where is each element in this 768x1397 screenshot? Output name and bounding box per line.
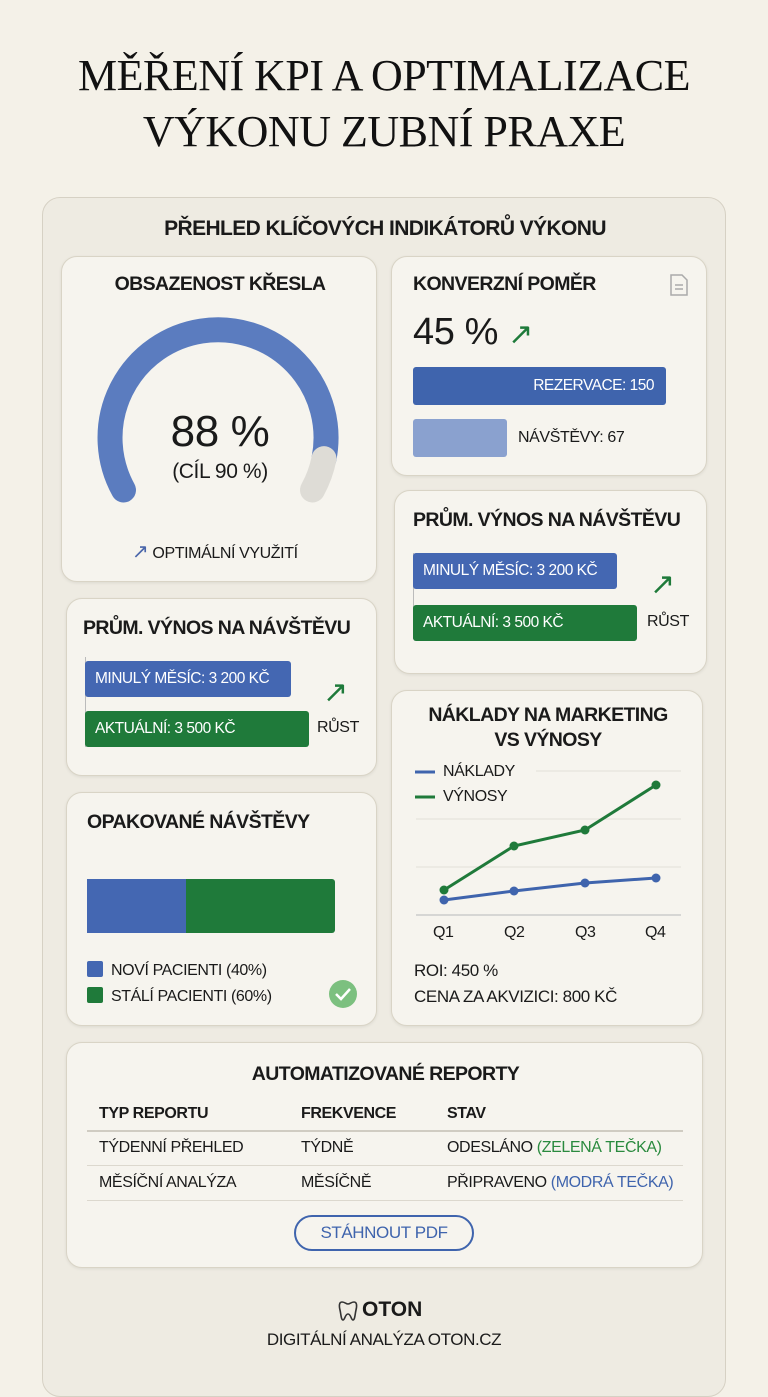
title xyxy=(78,51,690,156)
panel: repeat visits: STÁLÍ PACIENTI (60%) xyxy=(111,988,272,1005)
axis labels: Q1 xyxy=(433,924,454,941)
panel: revenue right: PRŮM. VÝNOS NA NÁVŠTĚVU xyxy=(413,509,680,531)
panel: repeat visits xyxy=(66,792,377,1026)
bars: MINULÝ MĚSÍC: 3 200 KČ xyxy=(95,670,269,687)
stacked bar xyxy=(87,879,335,933)
gauge xyxy=(98,317,339,502)
table xyxy=(87,1105,683,1201)
button: STÁHNOUT PDF xyxy=(320,1223,448,1242)
panel: revenue right: RŮST xyxy=(647,613,689,630)
heading: KONVERZNÍ POMĚR xyxy=(413,273,596,295)
panel: revenue right: AKTUÁLNÍ: 3 500 KČ xyxy=(423,614,563,631)
table: TÝDENNÍ PŘEHLED xyxy=(99,1139,243,1156)
value: 88 % xyxy=(171,407,269,456)
table: ODESLÁNO (ZELENÁ TEČKA) xyxy=(447,1139,662,1156)
panel: marketing chart: Q3 xyxy=(575,924,596,941)
panel: repeat visits: OPAKOVANÉ NÁVŠTĚVY xyxy=(87,811,310,833)
panel: conversion: NÁVŠTĚVY: 67 xyxy=(518,429,624,446)
panel: marketing chart: NÁKLADY xyxy=(443,763,515,780)
table: MĚSÍČNÍ ANALÝZA xyxy=(99,1174,236,1191)
icon: growth arrow: ↗ xyxy=(323,676,348,709)
section heading: PŘEHLED KLÍČOVÝCH INDIKÁTORŮ VÝKONU xyxy=(164,217,606,240)
icon: tooth xyxy=(338,1301,358,1321)
title: MĚŘENÍ KPI A OPTIMALIZACE xyxy=(78,51,690,100)
legend: NOVÍ PACIENTI (40%) xyxy=(111,962,267,979)
footer text: DIGITÁLNÍ ANALÝZA OTON.CZ xyxy=(267,1330,501,1349)
panel: marketing chart: Q2 xyxy=(504,924,525,941)
panel: conversion xyxy=(391,256,707,476)
bars xyxy=(85,661,291,697)
panel: marketing chart: NÁKLADY NA MARKETING xyxy=(428,704,668,726)
panel: chair occupancy xyxy=(61,256,377,582)
value: 45 % ↗ xyxy=(413,311,533,353)
panel: revenue left xyxy=(66,598,377,776)
panel: revenue right xyxy=(394,490,707,674)
table: TÝDNĚ xyxy=(301,1139,353,1156)
panel: marketing chart: Q4 xyxy=(645,924,666,941)
panel: marketing chart: VÝNOSY xyxy=(443,788,507,805)
icon: growth arrow: ↗ xyxy=(650,568,675,601)
table: PŘIPRAVENO (MODRÁ TEČKA) xyxy=(447,1174,673,1191)
icon: check xyxy=(329,980,357,1008)
panel: revenue left: RŮST xyxy=(317,719,359,736)
title: VÝKONU ZUBNÍ PRAXE xyxy=(143,107,625,156)
panel: chair occupancy: (CÍL 90 %) xyxy=(172,460,268,483)
table: FREKVENCE xyxy=(301,1105,396,1122)
table: MĚSÍČNĚ xyxy=(301,1174,371,1191)
line chart xyxy=(415,770,681,916)
footer logo: OTON xyxy=(362,1298,422,1321)
table: STAV xyxy=(447,1105,486,1122)
note: ↗ OPTIMÁLNÍ VYUŽITÍ xyxy=(132,541,298,563)
panel: revenue left: PRŮM. VÝNOS NA NÁVŠTĚVU xyxy=(83,617,350,639)
bars: REZERVACE: 150 xyxy=(533,377,654,394)
table: TYP REPORTU xyxy=(99,1105,208,1122)
bars: MINULÝ MĚSÍC: 3 200 KČ xyxy=(423,562,597,579)
button xyxy=(294,1215,474,1251)
icon: document xyxy=(670,274,688,296)
panel: automated reports: AUTOMATIZOVANÉ REPORTY xyxy=(252,1063,519,1085)
panel: marketing chart xyxy=(391,690,703,1026)
panel: marketing chart: VS VÝNOSY xyxy=(494,729,602,751)
bars xyxy=(413,367,666,405)
panel: automated reports xyxy=(66,1042,703,1268)
panel: revenue left: AKTUÁLNÍ: 3 500 KČ xyxy=(95,720,235,737)
panel: marketing chart: CENA ZA AKVIZICI: 800 KČ xyxy=(414,987,617,1006)
stats: ROI: 450 % xyxy=(414,961,498,980)
panel: main xyxy=(42,197,726,1397)
heading: OBSAZENOST KŘESLA xyxy=(115,273,325,295)
bars xyxy=(413,553,617,589)
